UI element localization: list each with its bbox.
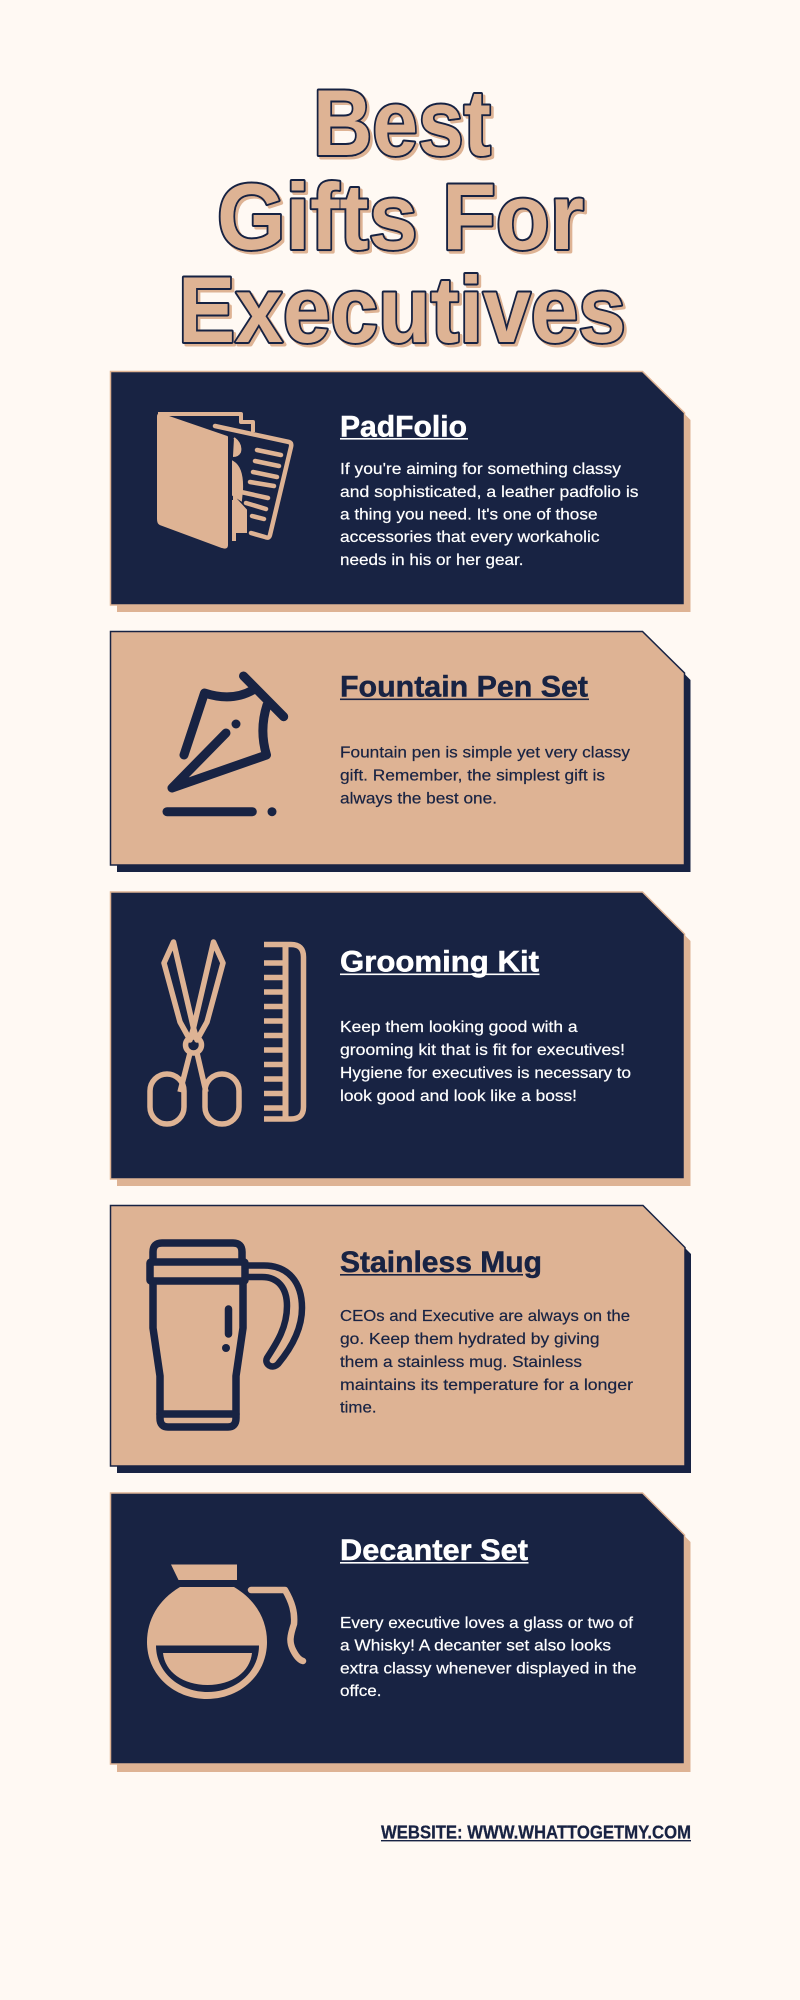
- text block: Fountain Pen Set: gift. Remember, the simplest gift is: [340, 768, 605, 784]
- panel: Fountain Pen Set: [110, 632, 690, 872]
- icon: stainless mug: [150, 1243, 302, 1427]
- text block: Decanter Set: offce.: [340, 1683, 382, 1700]
- panel: Decanter Set: [110, 1493, 690, 1772]
- panel 2 shadow: [117, 638, 690, 872]
- text block: Grooming Kit: grooming kit that is fit for executives!: [340, 1042, 625, 1059]
- title: [178, 70, 626, 362]
- text block: Decanter Set: Every executive loves a glass or two of: [340, 1615, 634, 1632]
- heading: Stainless Mug: Stainless Mug: [340, 1246, 542, 1279]
- heading: PadFolio: PadFolio: [340, 410, 467, 444]
- text block: Stainless Mug: them a stainless mug. Stainless: [340, 1354, 582, 1371]
- title: Best: [313, 70, 491, 175]
- heading: Grooming Kit: Grooming Kit: [340, 946, 539, 978]
- text block: Stainless Mug: CEOs and Executive are always on the: [340, 1308, 630, 1325]
- panel 5 card: [110, 1493, 684, 1764]
- icon: fountain pen: [167, 676, 284, 816]
- text block: Stainless Mug: [340, 1308, 634, 1416]
- text block: PadFolio: If you're aiming for something classy: [340, 461, 621, 478]
- icon: comb: [264, 944, 304, 1119]
- panel 4 shadow: [117, 1212, 691, 1473]
- text block: PadFolio: [340, 461, 638, 569]
- panel 2 card: [110, 632, 684, 865]
- footer website link: WEBSITE: WWW.WHATTOGETMY.COM: [381, 1822, 691, 1842]
- heading: Fountain Pen Set: Fountain Pen Set: [340, 670, 588, 704]
- text block: PadFolio: a thing you need. It's one of those: [340, 506, 598, 524]
- text block: Fountain Pen Set: Fountain pen is simple yet very classy: [340, 744, 630, 762]
- text block: PadFolio: accessories that every workaholic: [340, 529, 600, 546]
- text block: Grooming Kit: [340, 1019, 631, 1105]
- panel: Grooming Kit: [110, 892, 690, 1186]
- text block: Grooming Kit: Keep them looking good with a: [340, 1019, 578, 1036]
- text block: Decanter Set: a Whisky! A decanter set also looks: [340, 1638, 611, 1654]
- title: Executives: [178, 257, 626, 362]
- panel: Stainless Mug: [110, 1206, 691, 1473]
- panel 5 shadow: [117, 1500, 690, 1772]
- icon: padfolio: [158, 414, 291, 548]
- panel 1 card: [110, 372, 684, 605]
- text block: Stainless Mug: maintains its temperature for a longer: [340, 1377, 634, 1394]
- text block: PadFolio: and sophisticated, a leather padfolio is: [340, 484, 638, 501]
- text block: Stainless Mug: go. Keep them hydrated by giving: [340, 1331, 600, 1348]
- text block: Fountain Pen Set: [340, 744, 630, 808]
- text block: Decanter Set: [340, 1615, 637, 1700]
- panel 3 card: [110, 892, 684, 1179]
- icon: decanter: [147, 1564, 303, 1699]
- text block: Decanter Set: extra classy whenever displayed in the: [340, 1660, 637, 1678]
- heading: Decanter Set: Decanter Set: [340, 1534, 528, 1567]
- icon: scissors: [150, 942, 239, 1124]
- title: Gifts For: [217, 164, 584, 269]
- panel: PadFolio: [110, 372, 690, 612]
- panel 3 shadow: [117, 899, 690, 1186]
- text block: Stainless Mug: time.: [340, 1400, 376, 1416]
- text block: Grooming Kit: Hygiene for executives is necessary to: [340, 1065, 631, 1082]
- text block: Grooming Kit: look good and look like a boss!: [340, 1088, 577, 1105]
- text block: Fountain Pen Set: always the best one.: [340, 790, 497, 808]
- text block: PadFolio: needs in his or her gear.: [340, 552, 524, 569]
- panel 4 card: [110, 1206, 685, 1466]
- panel 1 shadow: [117, 378, 690, 612]
